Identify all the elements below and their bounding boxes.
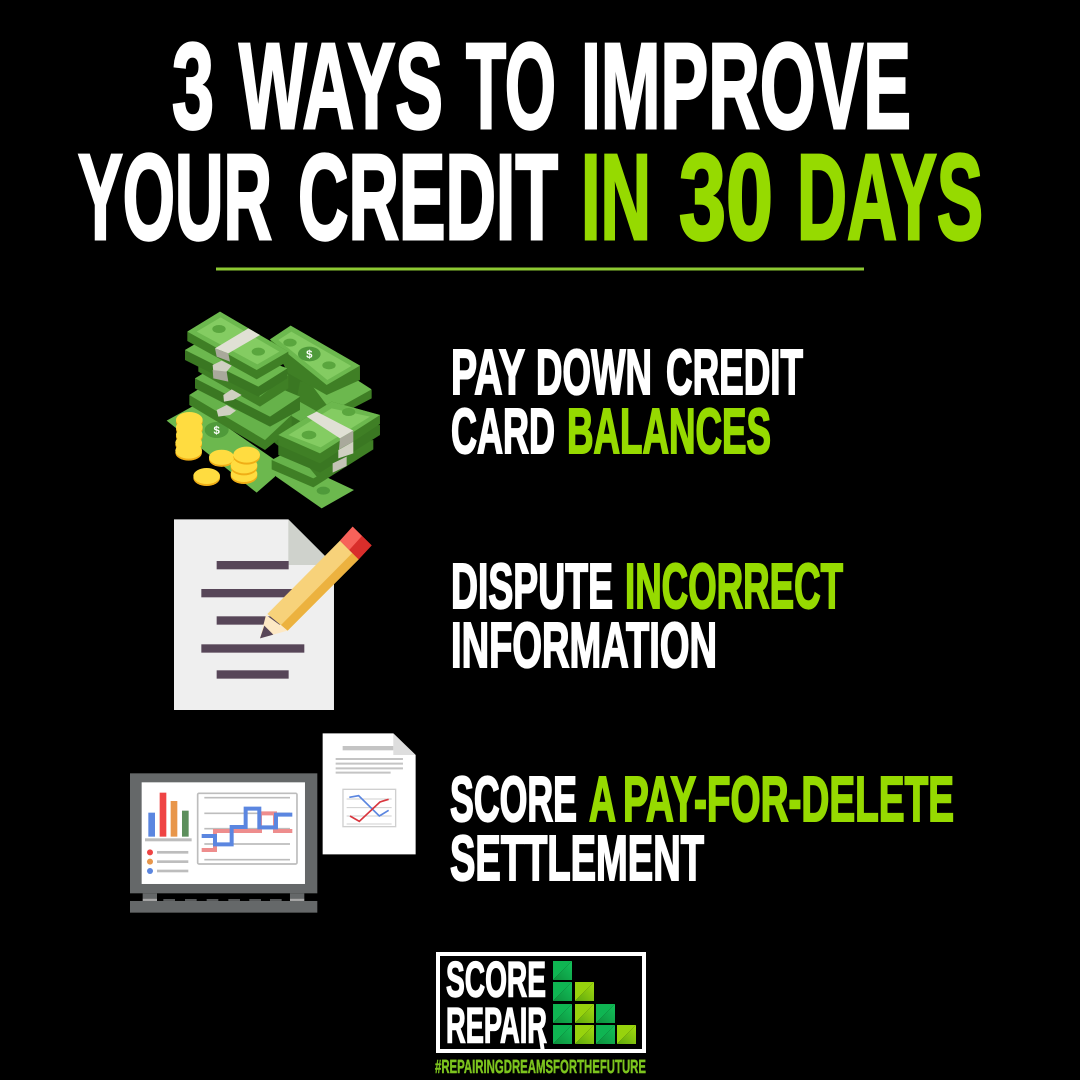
text: score a pay-for-delete settlement (450, 763, 954, 894)
icon: money stacks and coins: $ (306, 348, 312, 361)
title: TO (466, 18, 556, 154)
text: dispute incorrect information: INFORMATION (451, 609, 717, 681)
text: pay down credit card balances: PAY (451, 336, 525, 408)
title: IN (581, 129, 651, 265)
title: 30 (679, 129, 773, 265)
logo: score repair: REPAIR (446, 998, 547, 1054)
text: pay down credit card balances: BALANCES (567, 395, 771, 467)
text: score a pay-for-delete settlement: SCORE (450, 763, 577, 835)
text: pay down credit card balances: DOWN (536, 336, 652, 408)
icon: money stacks and coins (167, 312, 380, 508)
title (78, 18, 983, 265)
icon: document and pencil (174, 519, 372, 710)
text: score a pay-for-delete settlement: A (589, 763, 616, 835)
title: WAYS (239, 18, 443, 154)
text: pay down credit card balances: CREDIT (666, 336, 803, 408)
logo: score repair: SCORE (446, 952, 546, 1008)
title: 3 (172, 18, 214, 154)
icon: laptop with charts and report (130, 733, 416, 913)
icon: money stacks and coins: $ (214, 424, 220, 437)
logo: score repair: #REPAIRINGDREAMSFORTHEFUTURE (435, 1057, 646, 1078)
title: YOUR (78, 129, 272, 265)
text: pay down credit card balances (451, 336, 803, 467)
logo: score repair (435, 952, 646, 1078)
text: dispute incorrect information: DISPUTE (451, 550, 613, 622)
text: dispute incorrect information (451, 550, 843, 681)
text: pay down credit card balances: CARD (451, 395, 555, 467)
text: dispute incorrect information: INCORRECT (625, 550, 843, 622)
text: score a pay-for-delete settlement: SETTLEMENT (450, 822, 704, 894)
title: CREDIT (298, 129, 558, 265)
